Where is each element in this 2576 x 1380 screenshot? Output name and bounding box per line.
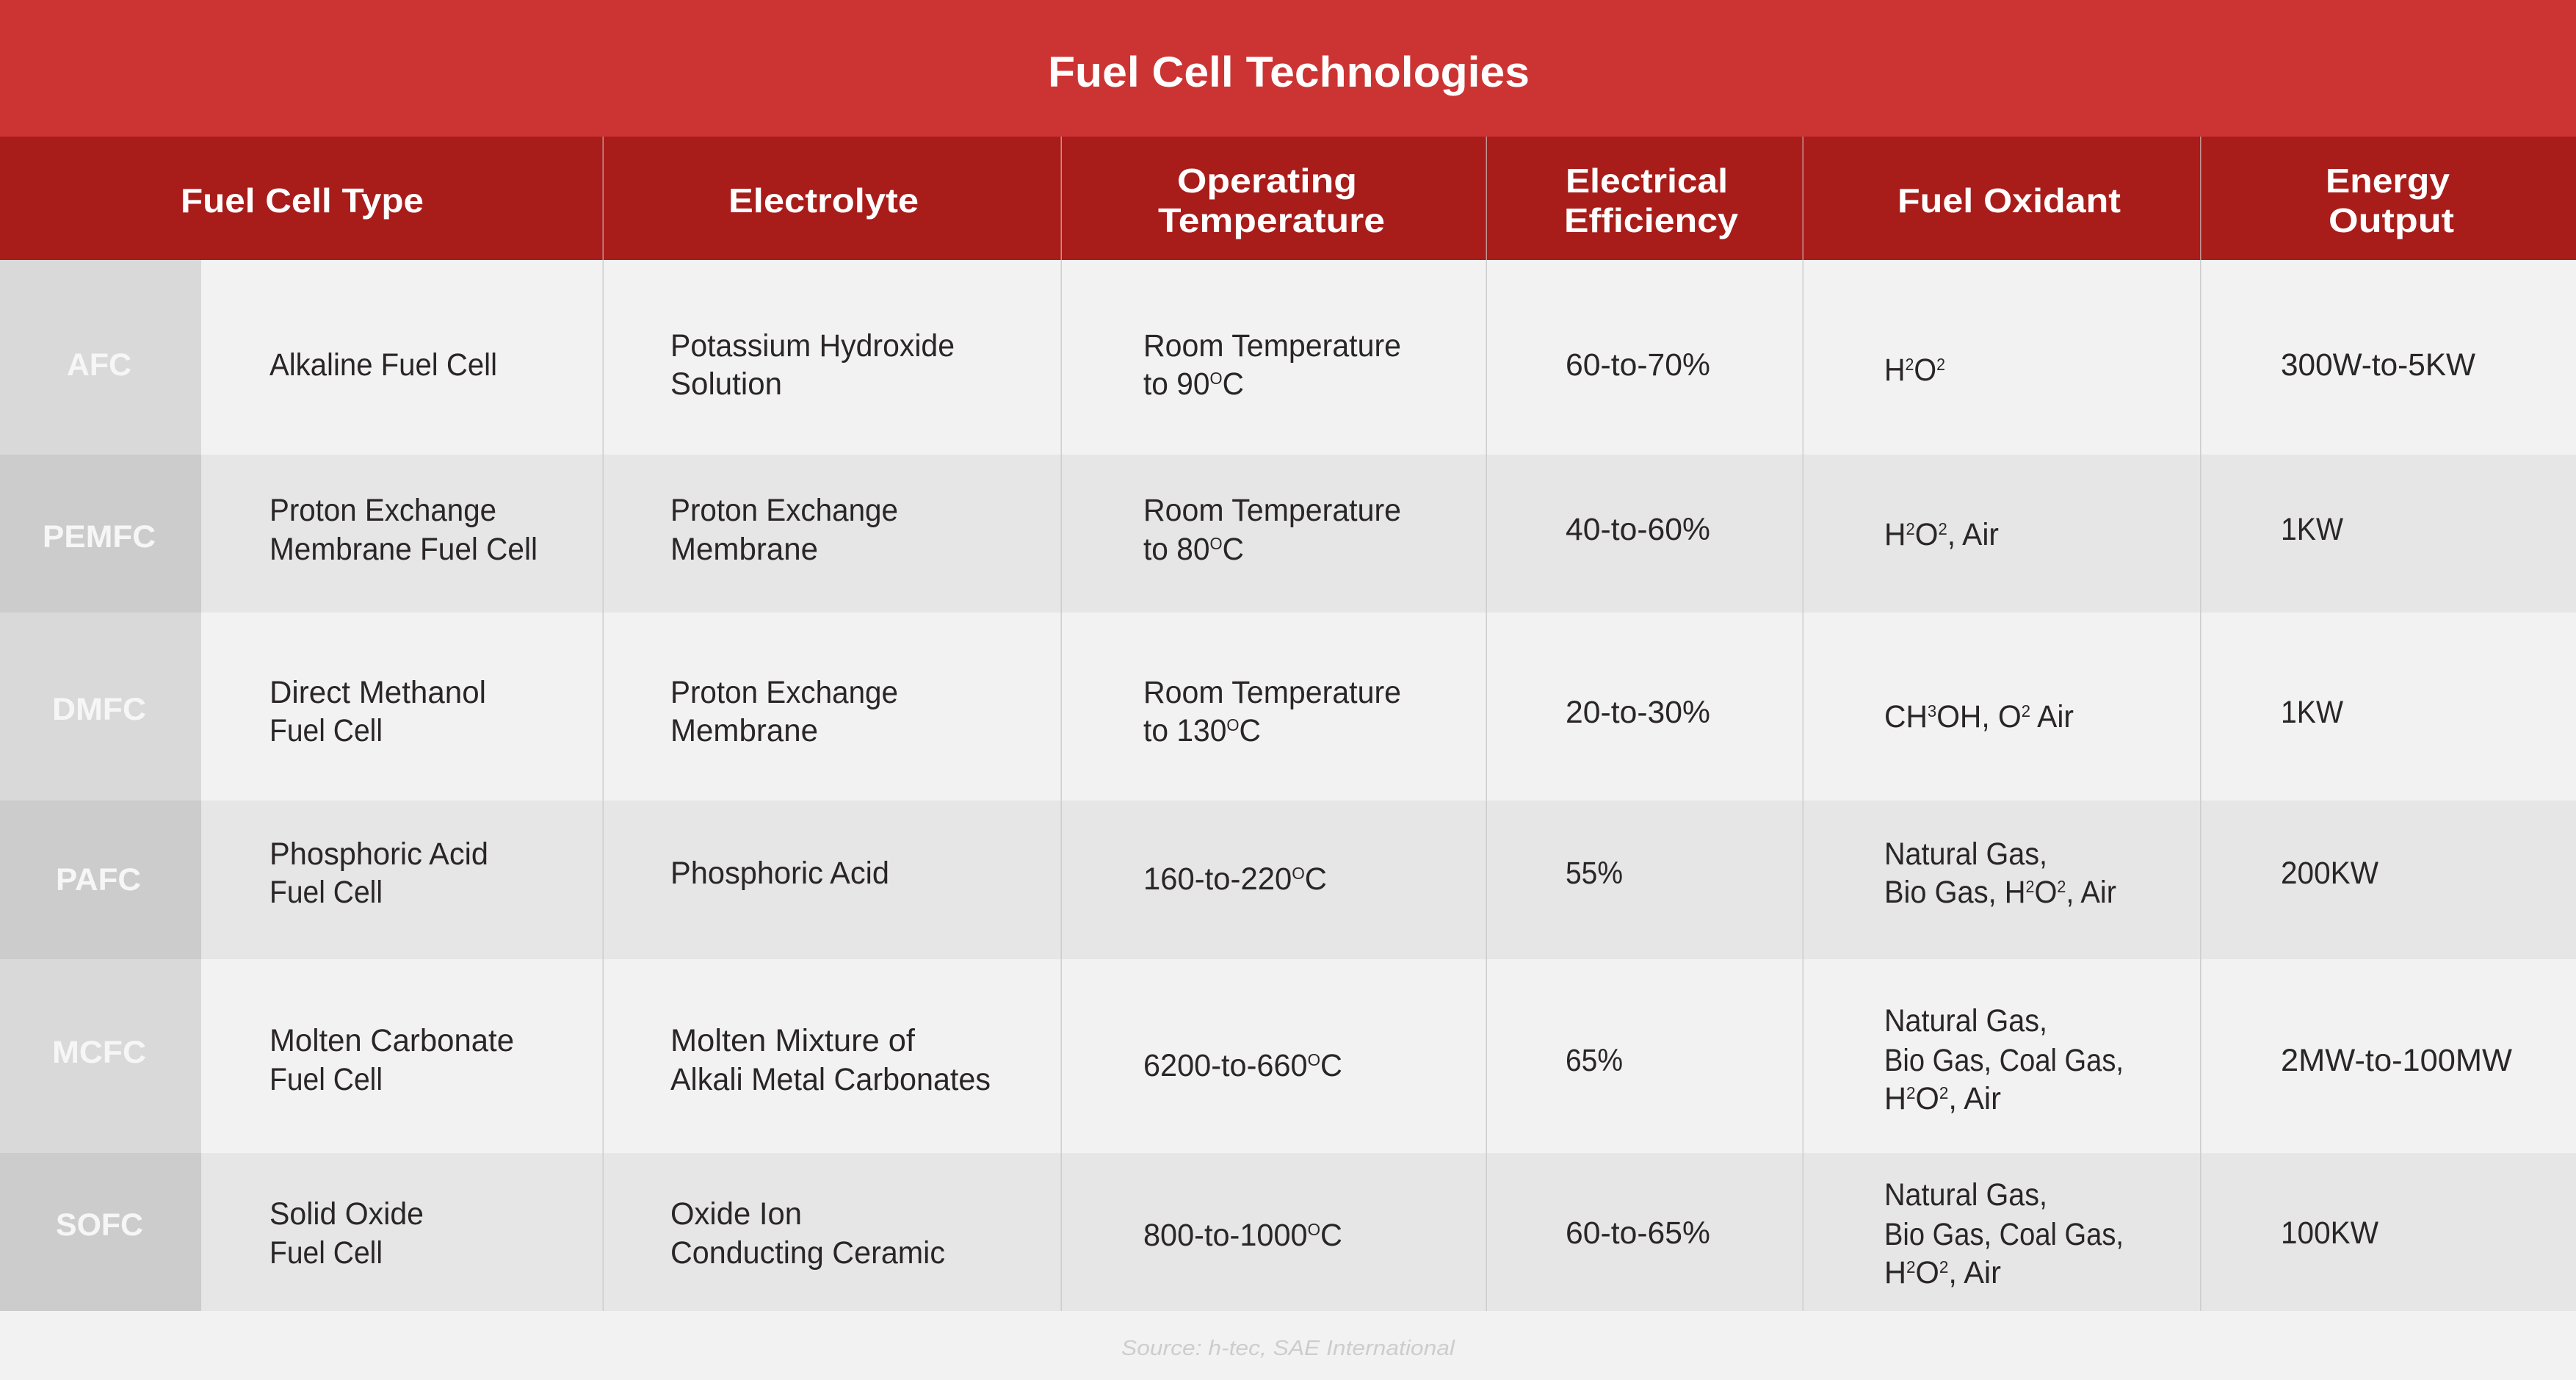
type: Proton Exchange xyxy=(269,494,496,528)
electrolyte xyxy=(670,676,898,748)
type: Direct Methanol xyxy=(269,676,486,710)
label: SOFC: SOFC xyxy=(56,1207,143,1243)
temperature: O xyxy=(1308,1050,1320,1069)
temperature: O xyxy=(1226,715,1240,734)
temperature xyxy=(1143,329,1401,402)
header: Fuel Oxidant: Fuel Oxidant xyxy=(1897,181,2121,220)
output: 1KW xyxy=(2281,513,2343,547)
oxidant xyxy=(1884,837,2116,910)
row: PEMFC xyxy=(0,455,2576,613)
oxidant: 2 xyxy=(1906,1083,1916,1102)
electrolyte xyxy=(670,1024,991,1097)
oxidant: O xyxy=(2034,875,2057,910)
oxidant: H xyxy=(1884,353,1907,388)
label: AFC: AFC xyxy=(67,347,131,383)
electrolyte: Proton Exchange xyxy=(670,494,898,528)
electrolyte: Alkali Metal Carbonates xyxy=(670,1063,991,1097)
type: Fuel Cell xyxy=(269,1236,383,1271)
oxidant: Air xyxy=(2030,700,2074,734)
label: MCFC: MCFC xyxy=(52,1035,146,1070)
oxidant: O xyxy=(1914,353,1936,388)
oxidant: Natural Gas, xyxy=(1884,837,2047,872)
header: Electrical Efficiency: Electrical xyxy=(1566,162,1728,200)
header: Electrical Efficiency xyxy=(1564,162,1738,239)
temperature: O xyxy=(1209,534,1223,553)
row: AFC xyxy=(0,260,2576,455)
row: SOFC xyxy=(0,1153,2576,1311)
electrolyte: Oxide Ion xyxy=(670,1197,802,1232)
type xyxy=(269,676,486,748)
header: Electrical Efficiency: Efficiency xyxy=(1564,201,1738,239)
temperature: C xyxy=(1320,1218,1342,1253)
oxidant: 2 xyxy=(1939,1257,1948,1276)
temperature: C xyxy=(1240,714,1261,748)
oxidant: 3 xyxy=(1928,701,1936,720)
temperature: C xyxy=(1305,862,1327,897)
temperature: O xyxy=(1292,864,1305,883)
electrolyte: Proton Exchange xyxy=(670,676,898,710)
oxidant: H xyxy=(1884,518,1907,552)
header: Operating Temperature: Temperature xyxy=(1158,201,1385,239)
label: PEMFC: PEMFC xyxy=(43,519,156,554)
output: 300W-to-5KW xyxy=(2281,348,2475,383)
row: MCFC xyxy=(0,959,2576,1153)
type: Fuel Cell xyxy=(269,1063,383,1097)
oxidant xyxy=(1884,1004,2124,1116)
oxidant: , Air xyxy=(1948,1082,2001,1116)
header: Electrolyte: Electrolyte xyxy=(728,181,919,220)
type xyxy=(269,494,538,567)
electrolyte xyxy=(670,1197,945,1271)
header: Operating Temperature xyxy=(1158,162,1385,239)
title: Fuel Cell Technologies xyxy=(1048,48,1530,96)
label: DMFC: DMFC xyxy=(52,692,146,727)
oxidant: Natural Gas, xyxy=(1884,1178,2047,1213)
efficiency: 65% xyxy=(1566,1044,1623,1078)
type: Molten Carbonate xyxy=(269,1024,514,1058)
temperature: Room Temperature xyxy=(1143,676,1401,710)
oxidant: H xyxy=(1884,1082,1907,1116)
efficiency: 60-to-65% xyxy=(1566,1216,1710,1251)
temperature: C xyxy=(1223,532,1244,567)
oxidant: Bio Gas, Coal Gas, xyxy=(1884,1218,2124,1252)
electrolyte: Molten Mixture of xyxy=(670,1024,915,1058)
output: 2MW-to-100MW xyxy=(2281,1044,2512,1078)
row: PAFC xyxy=(0,801,2576,959)
oxidant: , Air xyxy=(1947,518,1999,552)
oxidant: CH xyxy=(1884,700,1929,734)
type: Phosphoric Acid xyxy=(269,837,488,872)
oxidant: 2 xyxy=(1936,355,1945,374)
oxidant: O xyxy=(1916,1082,1939,1116)
oxidant: 2 xyxy=(2025,877,2034,896)
temperature: 800-to-1000 xyxy=(1143,1218,1311,1253)
temperature: 6200-to-660 xyxy=(1143,1049,1311,1083)
oxidant: , Air xyxy=(2066,875,2116,910)
type xyxy=(269,1024,514,1097)
oxidant: , Air xyxy=(1948,1256,2001,1290)
electrolyte: Phosphoric Acid xyxy=(670,856,889,891)
electrolyte xyxy=(670,494,898,567)
type xyxy=(269,837,488,910)
oxidant: 2 xyxy=(1938,519,1947,538)
electrolyte xyxy=(670,329,955,402)
oxidant: Bio Gas, H xyxy=(1884,875,2036,910)
electrolyte: Conducting Ceramic xyxy=(670,1236,945,1271)
electrolyte: Solution xyxy=(670,367,782,402)
oxidant: 2 xyxy=(1939,1083,1948,1102)
temperature: Room Temperature xyxy=(1143,329,1401,364)
header: Energy Output xyxy=(2326,162,2454,239)
table header row xyxy=(0,137,2576,260)
header: Fuel Cell Type: Fuel Cell Type xyxy=(181,181,424,220)
temperature: C xyxy=(1320,1049,1342,1083)
temperature xyxy=(1143,494,1401,567)
efficiency: 60-to-70% xyxy=(1566,348,1710,383)
header: Operating Temperature: Operating xyxy=(1177,162,1357,200)
header: Energy Output: Output xyxy=(2329,201,2454,239)
temperature xyxy=(1143,676,1401,748)
oxidant: H xyxy=(1884,1256,1907,1290)
type: Fuel Cell xyxy=(269,875,383,910)
oxidant xyxy=(1884,1178,2124,1290)
oxidant: 2 xyxy=(1906,1257,1916,1276)
oxidant: 2 xyxy=(1906,519,1915,538)
temperature: to 80 xyxy=(1143,532,1213,567)
output: 1KW xyxy=(2281,696,2343,730)
type xyxy=(269,1197,424,1271)
row: DMFC xyxy=(0,613,2576,801)
temperature: to 90 xyxy=(1143,367,1213,402)
type: Membrane Fuel Cell xyxy=(269,532,538,567)
header: Energy Output: Energy xyxy=(2326,162,2450,200)
oxidant: 2 xyxy=(2022,701,2030,720)
oxidant: OH, O xyxy=(1936,700,2022,734)
source note: Source: h-tec, SAE International xyxy=(1121,1337,1456,1360)
efficiency: 20-to-30% xyxy=(1566,696,1710,730)
temperature: 160-to-220 xyxy=(1143,862,1295,897)
electrolyte: Membrane xyxy=(670,714,818,748)
electrolyte: Membrane xyxy=(670,532,818,567)
oxidant: O xyxy=(1916,1256,1939,1290)
efficiency: 55% xyxy=(1566,856,1623,891)
output: 200KW xyxy=(2281,856,2378,891)
electrolyte: Potassium Hydroxide xyxy=(670,329,955,364)
oxidant: Bio Gas, Coal Gas, xyxy=(1884,1044,2124,1078)
temperature: O xyxy=(1308,1220,1320,1239)
efficiency: 40-to-60% xyxy=(1566,513,1710,547)
oxidant: Natural Gas, xyxy=(1884,1004,2047,1038)
type: Fuel Cell xyxy=(269,714,383,748)
type: Solid Oxide xyxy=(269,1197,424,1232)
temperature: O xyxy=(1209,369,1223,388)
output: 100KW xyxy=(2281,1216,2378,1251)
oxidant: 2 xyxy=(1906,355,1914,374)
temperature: Room Temperature xyxy=(1143,494,1401,528)
oxidant: O xyxy=(1915,518,1938,552)
temperature: to 130 xyxy=(1143,714,1230,748)
type: Alkaline Fuel Cell xyxy=(269,348,497,383)
title banner xyxy=(0,0,2576,137)
label: PAFC: PAFC xyxy=(56,862,141,897)
temperature: C xyxy=(1223,367,1244,402)
oxidant: 2 xyxy=(2057,877,2066,896)
